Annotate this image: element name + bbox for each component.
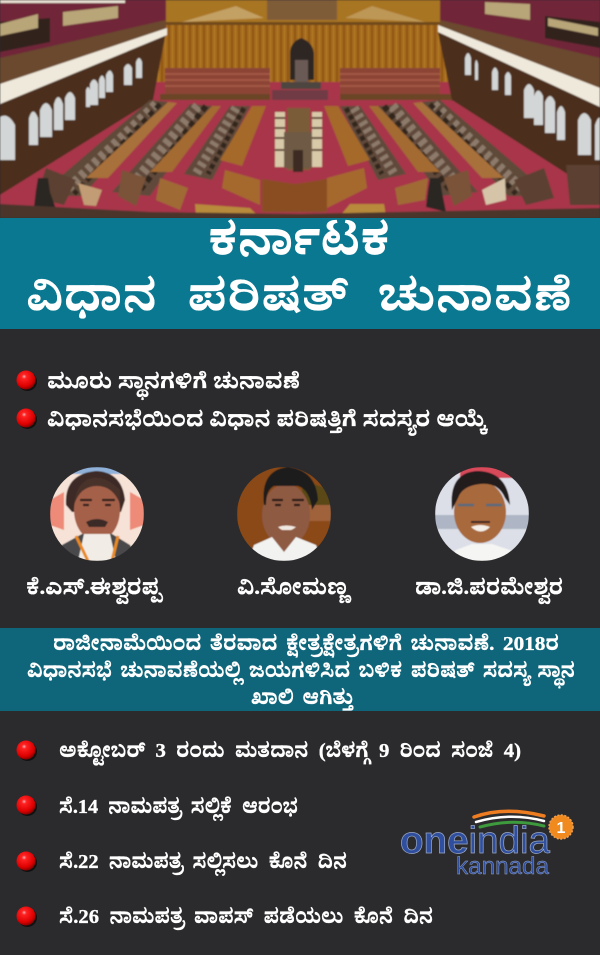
statues [34, 178, 446, 212]
name: Dr. G. Parameshwara: ಡಾ.ಜಿ.ಪರಮೇಶ್ವರ [415, 575, 563, 604]
name: K. S. Eshwarappa: ಕೆ.ಎಸ್.ಈಶ್ವರಪ್ಪ [26, 575, 163, 604]
schedule item 4: ಸೆ.26 ನಾಮಪತ್ರ ವಾಪಸ್ ಪಡೆಯಲು ಕೊನೆ ದಿನ [59, 906, 433, 930]
back wall wood panelling [150, 0, 450, 82]
white gallery beams [0, 25, 600, 107]
name: V. Somanna: ವಿ.ಸೋಮಣ್ಣ [237, 575, 351, 603]
left wall with arched windows [0, 32, 166, 195]
title line 2: ಪರಿಷತ್ [187, 271, 349, 320]
title line 2: ಚುನಾವಣೆ [378, 271, 572, 320]
portrait: Dr. G. Parameshwara [435, 467, 529, 561]
schedule item 3: ಸೆ.22 ನಾಮಪತ್ರ ಸಲ್ಲಿಸಲು ಕೊನೆ ದಿನ [59, 851, 347, 876]
logo wordmark: oneindia [400, 820, 551, 862]
schedule item 2: ಸೆ.14 ನಾಮಪತ್ರ ಸಲ್ಲಿಕೆ ಆರಂಭ [59, 796, 298, 821]
carpet [160, 99, 452, 109]
title band [0, 215, 600, 329]
info band [0, 628, 600, 711]
logo subtitle: kannada [456, 853, 550, 880]
info line 1: ರಾಜೀನಾಮೆಯಿಂದ ತೆರವಾದ ಕ್ಷೇತ್ರಕ್ಷೇತ್ರಗಳಿಗೆ ಚುನಾವಣೆ. 2018ರ [53, 633, 559, 658]
photo: legislative council chamber [0, 0, 600, 218]
logo badge: 1 [557, 820, 566, 837]
summary item 1 [16, 369, 300, 400]
bullet list: summary [16, 369, 488, 436]
member desks [36, 100, 600, 206]
portrait: V. Somanna [237, 467, 331, 561]
right gallery [440, 0, 600, 88]
logo: oneindia kannada [400, 811, 573, 880]
portrait: K. S. Eshwarappa [50, 467, 144, 561]
horseshoe desks [78, 168, 506, 216]
info line 3: ಖಾಲಿ ಆಗಿತ್ತು [251, 687, 354, 711]
title line 2 [26, 271, 572, 320]
back benches [160, 68, 452, 103]
speaker's chair [272, 38, 328, 108]
central clerk table [275, 108, 322, 172]
schedule item 1: ಅಕ್ಟೋಬರ್ 3 ರಂದು ಮತದಾನ (ಬೆಳಗ್ಗೆ 9 ರಿಂದ ಸಂಜೆ 4) [59, 740, 521, 765]
logo swoosh [474, 811, 544, 827]
front rail [0, 204, 600, 218]
left gallery [0, 0, 166, 85]
summary item 2: ವಿಧಾನಸಭೆಯಿಂದ ವಿಧಾನ ಪರಿಷತ್ತಿಗೆ ಸದಸ್ಯರ ಆಯ್ಕೆ [47, 407, 488, 436]
title line 2: ವಿಧಾನ [26, 271, 157, 320]
summary item 2 [16, 407, 488, 436]
bullet list: schedule [16, 740, 521, 930]
logo badge [549, 815, 573, 839]
right wall with arched windows [438, 32, 600, 174]
title line 1: ಕರ್ನಾಟಕ [208, 215, 390, 264]
info line 2: ವಿಧಾನಸಭೆ ಚುನಾವಣೆಯಲ್ಲಿ ಜಯಗಳಿಸಿದ ಬಳಿಕ ಪರಿಷತ್ ಸದಸ್ಯ ಸ್ಥಾನ [27, 660, 575, 688]
summary item 1: ಮೂರು ಸ್ಥಾನಗಳಿಗೆ ಚುನಾವಣೆ [47, 369, 300, 400]
